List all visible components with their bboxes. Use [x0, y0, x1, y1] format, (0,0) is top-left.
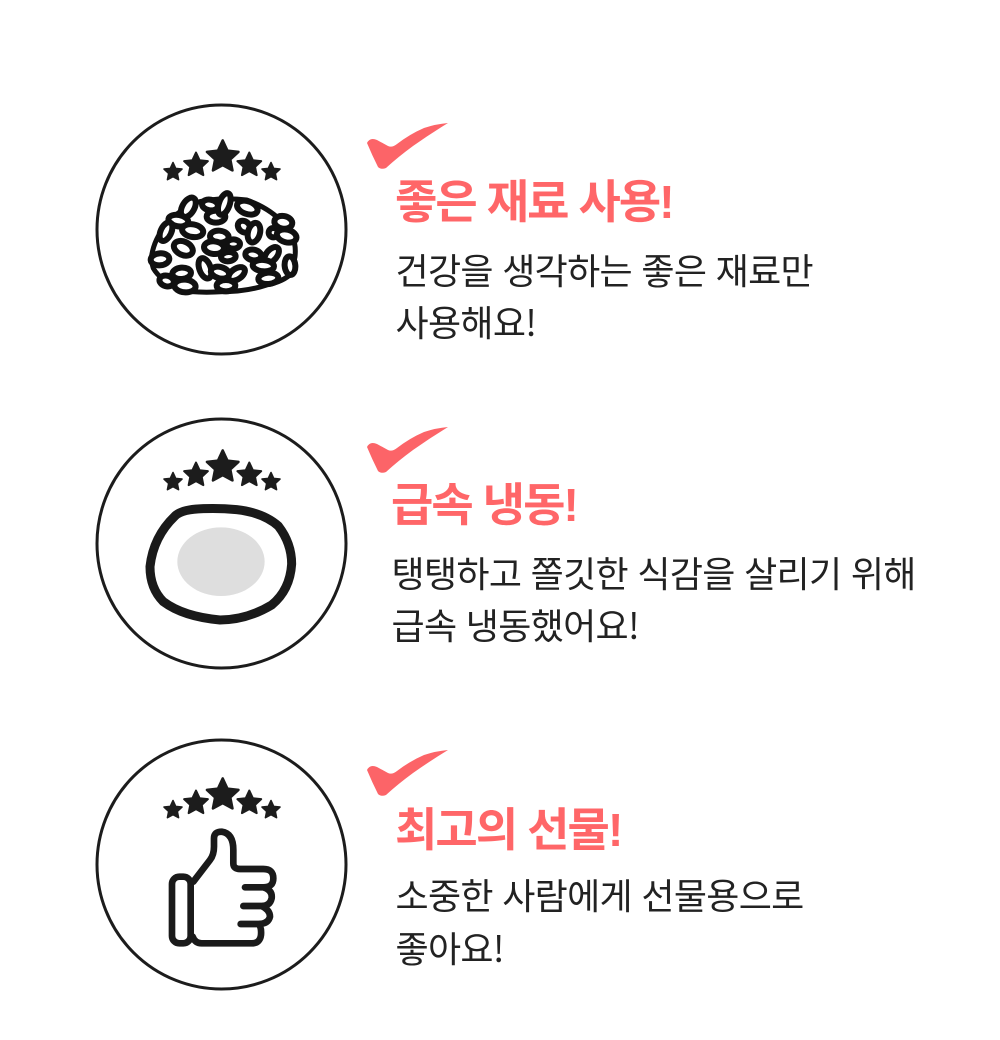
heading: good ingredients: 좋은 재료 사용! [395, 176, 673, 228]
icon: circle badge with thumbs up [97, 740, 346, 989]
heading: quick freezing: 급속 냉동! [391, 479, 577, 531]
icon: red check mark [367, 123, 448, 169]
text block: good ingredients description: 사용해요! [396, 295, 536, 347]
icon: red check mark [367, 427, 448, 473]
heading: best gift: 최고의 선물! [395, 804, 621, 856]
text block: good ingredients description: 건강을 생각하는 좋은 재료만 [396, 243, 813, 295]
panel: best gift [97, 740, 804, 989]
panel: quick freezing [97, 419, 916, 668]
text block: best gift description: 좋아요! [396, 921, 504, 973]
icon: circle badge with rice [97, 105, 346, 354]
panel: good ingredients [97, 105, 813, 354]
text block: quick freezing description: 급속 냉동했어요! [392, 598, 639, 650]
icon: red check mark [367, 750, 448, 796]
text block: quick freezing description: 탱탱하고 쫄깃한 식감을 살리기 위해 [392, 546, 916, 598]
text block: best gift description: 소중한 사람에게 선물용으로 [396, 868, 804, 920]
icon: circle badge with rice cake [97, 419, 346, 668]
